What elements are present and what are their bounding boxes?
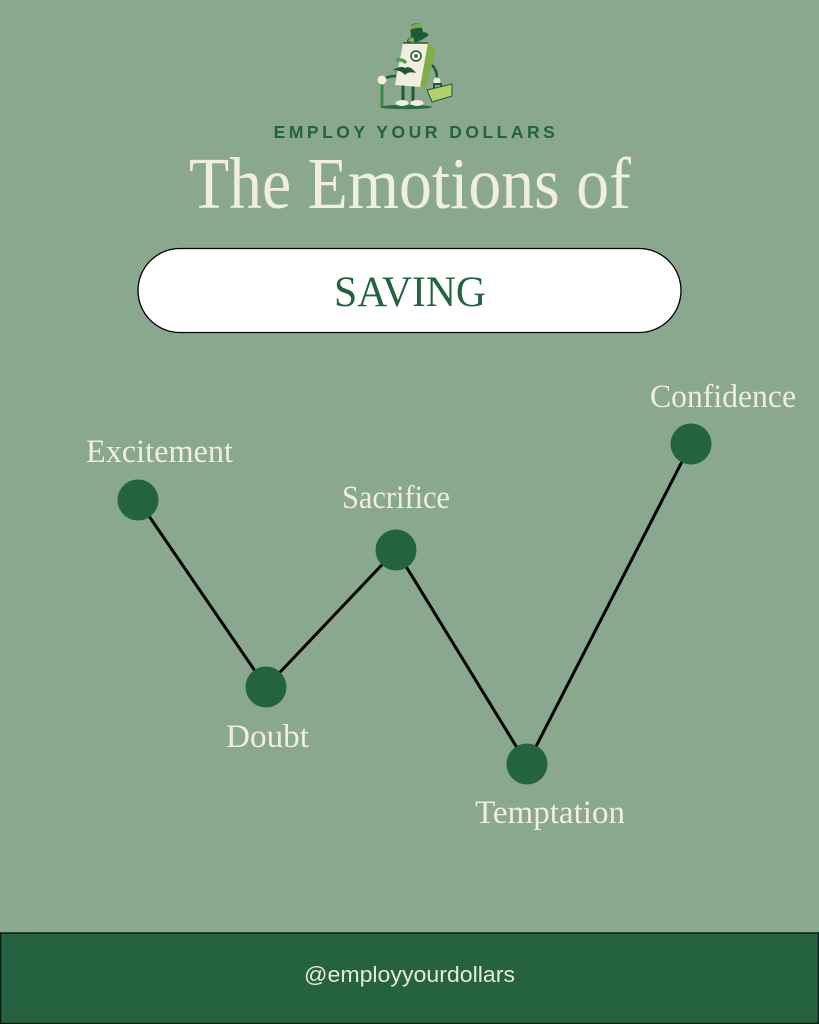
icon: dollar mascot logo (378, 23, 452, 109)
point: Excitement (86, 434, 233, 520)
point: Temptation: Temptation (475, 795, 625, 831)
line chart: emotional journey (86, 379, 796, 831)
point: Excitement: Excitement (86, 434, 233, 470)
point: Doubt: Doubt (226, 719, 309, 755)
point: Confidence: Confidence (650, 379, 796, 415)
point: Confidence (650, 379, 796, 464)
title: The Emotions of (189, 143, 632, 224)
point: Sacrifice: Sacrifice (342, 480, 450, 516)
pill: saving (138, 248, 681, 332)
pill: saving: SAVING (334, 269, 486, 316)
footer bar (0, 933, 818, 1024)
point: Doubt (226, 666, 309, 755)
point: Temptation (475, 744, 625, 831)
footer handle: @employyourdollars (304, 962, 515, 987)
point: Sacrifice (342, 480, 450, 570)
brand name: EMPLOY YOUR DOLLARS (274, 122, 558, 142)
